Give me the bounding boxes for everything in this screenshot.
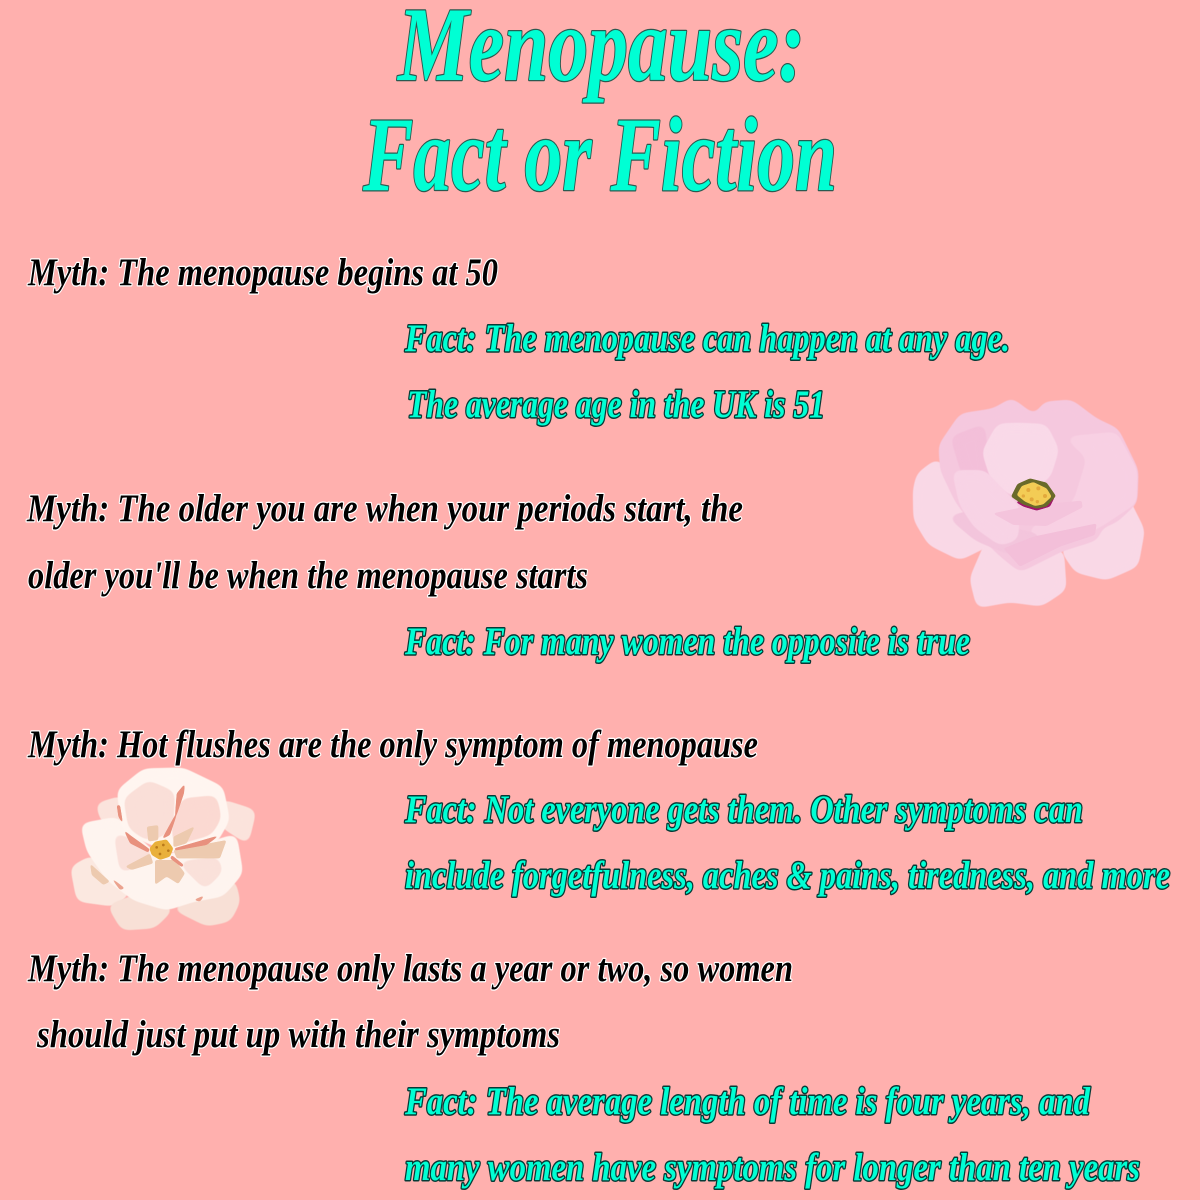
fact 3 bbox=[404, 788, 1170, 897]
icon: pink flower bbox=[913, 397, 1145, 608]
fact 4 bbox=[404, 1080, 1140, 1189]
stamen speckles bbox=[155, 844, 170, 855]
fact 3: Fact: Not everyone gets them. Other symptoms can bbox=[404, 788, 1083, 831]
myth 4: should just put up with their symptoms bbox=[36, 1013, 560, 1056]
stamen speckles bbox=[1022, 486, 1047, 503]
myth 4: Myth: The menopause only lasts a year or two, so women bbox=[27, 947, 793, 990]
fact 2: Fact: For many women the opposite is true bbox=[404, 620, 970, 663]
myth 2: older you'll be when the menopause starts bbox=[28, 554, 588, 597]
icon: peach flower bbox=[70, 767, 257, 931]
title bbox=[362, 0, 837, 213]
title: Fact or Fiction bbox=[362, 96, 837, 213]
myth 1: Myth: The menopause begins at 50 bbox=[27, 251, 498, 294]
fact 4: Fact: The average length of time is four years, and bbox=[404, 1080, 1090, 1123]
myth 3: Myth: Hot flushes are the only symptom of menopause bbox=[27, 723, 758, 766]
myth 2: Myth: The older you are when your periods start, the bbox=[26, 487, 743, 530]
fact 1: Fact: The menopause can happen at any age. bbox=[404, 317, 1010, 360]
fact 1: The average age in the UK is 51 bbox=[407, 383, 825, 426]
myth 4 bbox=[27, 947, 793, 1056]
myth 2 bbox=[26, 487, 743, 597]
fact 1 bbox=[404, 317, 1010, 426]
